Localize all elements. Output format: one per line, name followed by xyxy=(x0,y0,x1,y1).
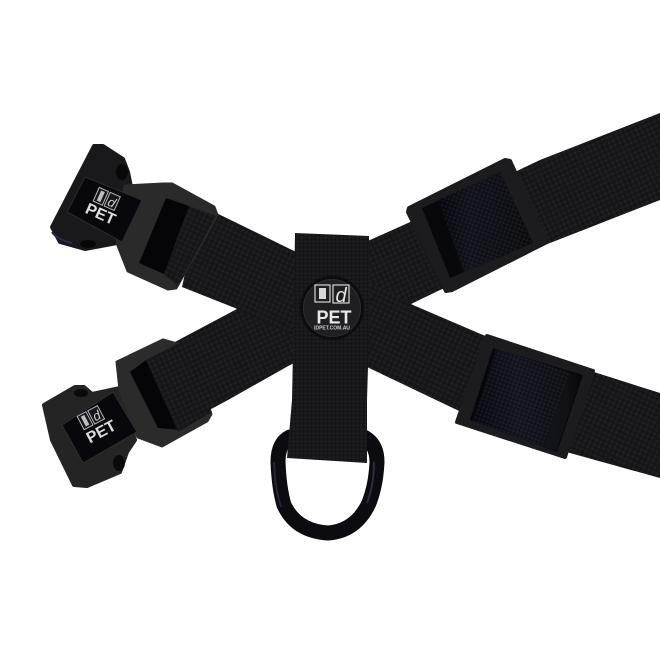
buckle window xyxy=(130,360,180,430)
frame xyxy=(408,160,545,291)
blue edge highlight xyxy=(52,232,72,243)
buckle head xyxy=(44,387,135,486)
logo: I box xyxy=(315,285,330,302)
buckle frame xyxy=(117,340,211,446)
plate logo xyxy=(76,402,119,447)
strap in window xyxy=(473,349,582,451)
strap texture xyxy=(473,349,570,447)
centre webbing tab xyxy=(287,233,370,463)
buckle window xyxy=(139,198,189,274)
buckle head xyxy=(52,146,131,250)
plate logo: PET xyxy=(83,201,118,229)
strap in window xyxy=(438,172,532,272)
side notches xyxy=(74,389,88,397)
side notches xyxy=(116,164,128,180)
strap: upper left to lower right xyxy=(182,205,660,478)
round logo badge xyxy=(300,276,364,340)
plate logo: d xyxy=(90,407,104,424)
window xyxy=(470,348,583,452)
logo: d letter: d xyxy=(335,285,347,307)
strap in window xyxy=(164,206,216,286)
plate logo: PET xyxy=(84,417,119,447)
slider buckle: lower right xyxy=(457,336,593,457)
buckle frame xyxy=(117,184,217,289)
logo: d box xyxy=(333,285,349,303)
buckle: lower left xyxy=(44,340,212,486)
plate logo: d xyxy=(105,194,119,211)
logo: web address: IDPET.COM.AU xyxy=(314,326,350,332)
glossy logo plate xyxy=(62,392,137,463)
frame xyxy=(457,336,593,457)
strap in window xyxy=(146,343,212,432)
slider buckle: upper right xyxy=(408,160,545,291)
glossy logo plate xyxy=(67,177,142,242)
strap: upper right to lower left xyxy=(173,113,660,415)
window xyxy=(422,172,533,278)
plate logo xyxy=(83,186,125,229)
buckle: upper left xyxy=(52,146,217,289)
strap texture xyxy=(438,172,532,272)
D-ring xyxy=(274,436,377,533)
logo: PET: PET xyxy=(316,308,352,328)
